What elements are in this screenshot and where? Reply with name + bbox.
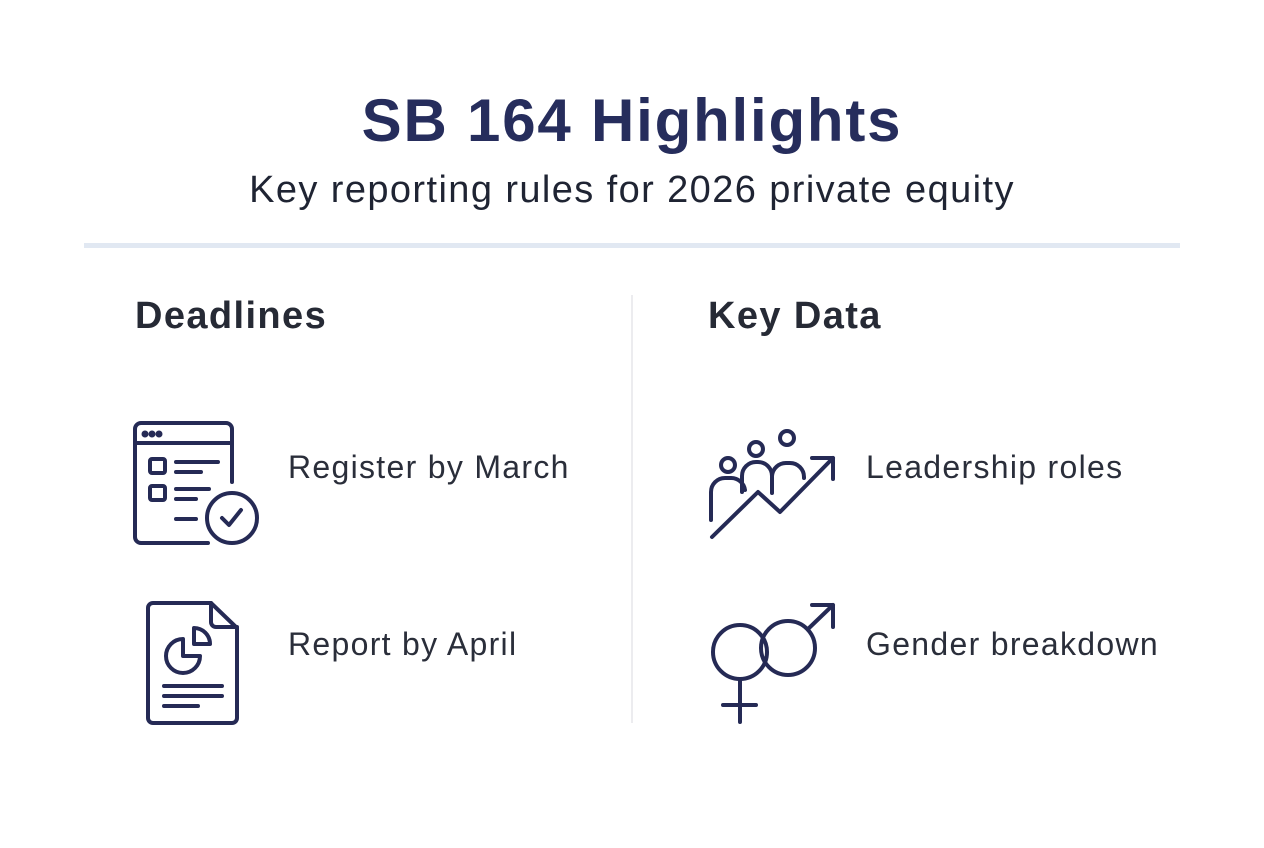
icon: gender symbols — [713, 605, 833, 722]
text: gender: Gender breakdown — [866, 626, 1159, 662]
subtitle: Key reporting rules for 2026 private equity — [249, 169, 1015, 211]
text: leadership: Leadership roles — [866, 449, 1123, 485]
text: report: Report by April — [288, 626, 517, 662]
icon: report document — [148, 603, 237, 723]
icon: registration form — [135, 423, 257, 543]
title: SB 164 Highlights — [362, 87, 902, 154]
heading: Key Data: Key Data — [708, 295, 882, 337]
icon: leadership growth — [711, 431, 833, 537]
text: register: Register by March — [288, 449, 570, 485]
heading: Deadlines: Deadlines — [135, 295, 327, 337]
